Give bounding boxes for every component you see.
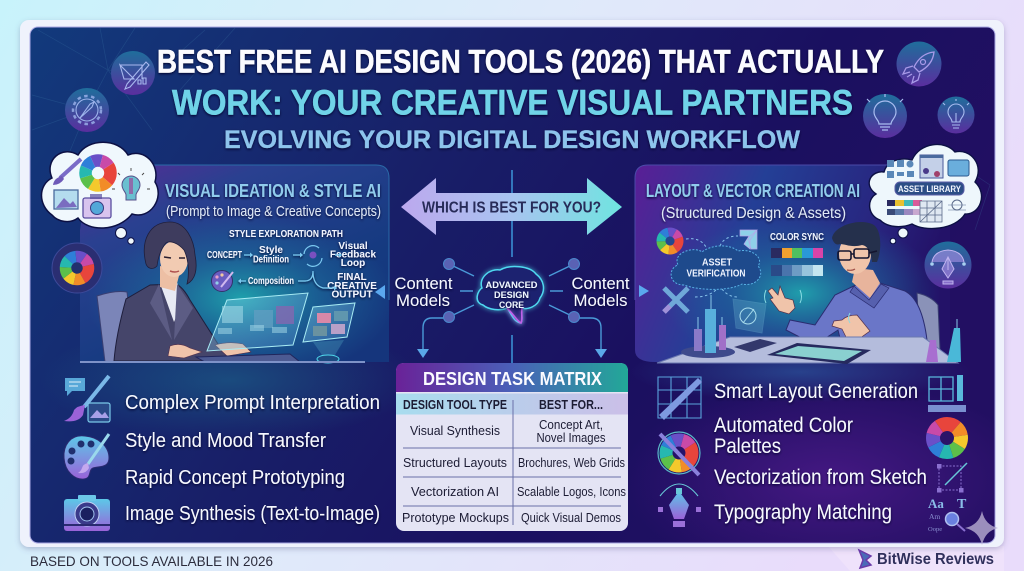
flow: style exploration path: Definition	[253, 254, 289, 266]
central spine	[511, 170, 513, 363]
swatches: color sync	[771, 248, 823, 276]
hub: advanced design core	[477, 267, 543, 323]
decorative icon orbs	[65, 42, 974, 138]
chair	[97, 292, 135, 362]
label: content models left: Content	[394, 274, 453, 293]
icon: vector shape	[740, 230, 757, 249]
illustration: woman	[114, 222, 251, 361]
table: design task matrix: Structured Layouts	[403, 456, 507, 470]
icon: camera	[64, 495, 110, 531]
flow: style exploration path: OUTPUT	[331, 290, 373, 300]
table: design task matrix: Quick Visual Demos	[521, 511, 621, 525]
panel: layout and vector	[635, 165, 961, 364]
model: towers on base	[681, 295, 735, 358]
icon: pen nib with bezier	[658, 484, 701, 527]
cloud: asset verification: ASSET	[702, 256, 732, 268]
list: right features: Vectorization from Sketch	[714, 466, 927, 489]
icon: play marker	[639, 285, 649, 297]
list: left features: Image Synthesis (Text-to-Image)	[125, 503, 380, 525]
flow: style exploration path: Style	[259, 245, 283, 256]
list: left features	[125, 392, 380, 525]
table: design task matrix: Prototype Mockups	[402, 511, 509, 525]
screen: tablet hologram	[303, 303, 355, 342]
icon: rocket orb	[896, 42, 942, 86]
table title: DESIGN TASK MATRIX	[423, 369, 602, 389]
cloud: asset verification	[671, 246, 761, 289]
icon: code folder	[948, 160, 969, 176]
table: design task matrix: Brochures, Web Grids	[518, 456, 625, 470]
icon: magnifier lens	[952, 200, 962, 210]
list: right features: Automated Color	[714, 414, 853, 437]
illustration: man	[764, 222, 927, 358]
footer tab	[828, 546, 1004, 571]
label: content models right	[572, 274, 630, 310]
arrow: which is best for you: WHICH IS BEST FOR YOU?	[422, 200, 601, 216]
hub: advanced design core: ADVANCED	[486, 280, 538, 290]
swatches: palette strip	[887, 200, 922, 215]
panel: visual ideation	[80, 165, 390, 363]
label: content models left: Models	[396, 291, 450, 310]
icon: gear orb	[65, 88, 109, 132]
icon: feedback loop	[304, 246, 322, 266]
thought cloud: asset library	[869, 144, 982, 244]
title line 1: BEST FREE AI DESIGN TOOLS (2026) THAT ACTUALLY	[157, 44, 884, 80]
icon: colour wheel	[86, 160, 110, 186]
desk	[657, 337, 958, 363]
list: right features: Typography Matching	[714, 501, 892, 524]
label: content models right: Models	[574, 291, 628, 310]
icon: crossed tools	[664, 288, 688, 312]
table: design task matrix	[396, 363, 628, 531]
icon: brush and image	[64, 376, 110, 422]
column headers	[396, 394, 628, 414]
icon: vector from sketch	[937, 463, 967, 492]
chair	[917, 293, 940, 350]
list: left features: Style and Mood Transfer	[125, 430, 326, 452]
flow: style exploration path: STYLE EXPLORATION PATH	[229, 229, 343, 240]
icons: small assets	[887, 160, 914, 178]
title line 3: EVOLVING YOUR DIGITAL DESIGN WORKFLOW	[224, 126, 800, 154]
list: right features	[714, 380, 927, 524]
table: design task matrix: Vectorization AI	[411, 485, 499, 499]
dashed connectors	[686, 236, 738, 297]
table: design task matrix: Novel Images	[536, 431, 606, 445]
heading: visual ideation: VISUAL IDEATION & STYLE AI	[165, 181, 381, 201]
icon: type magnifier: Aa	[928, 496, 944, 511]
table: design task matrix: BEST FOR...	[539, 398, 603, 412]
hub: advanced design core: DESIGN	[494, 290, 529, 300]
icon: crossed tools connector	[664, 306, 670, 312]
arrowheads to matrix	[417, 349, 607, 358]
icon: aperture orb	[52, 243, 102, 293]
list: right features: Smart Layout Generation	[714, 380, 918, 403]
footer note: BASED ON TOOLS AVAILABLE IN 2026	[30, 553, 273, 569]
icon: small bulb orb	[938, 96, 974, 134]
icon: type magnifier: Am	[929, 512, 940, 521]
icon: output arrow	[375, 285, 385, 299]
model: pen towers	[926, 319, 961, 362]
icon: brand logo	[859, 550, 871, 568]
icon: bulb orb	[863, 94, 907, 138]
table: design task matrix: Scalable Logos, Icons	[517, 485, 626, 499]
icon: colour dial and tool	[658, 432, 700, 475]
flow: style exploration path: FINAL	[337, 272, 367, 283]
icon: aperture small	[659, 230, 681, 252]
device: laptop	[196, 354, 300, 362]
arrow: which is best for you	[401, 178, 622, 235]
table: design task matrix: DESIGN TOOL TYPE	[403, 398, 507, 412]
heading: layout and vector: LAYOUT & VECTOR CREATION AI	[646, 181, 860, 201]
title	[157, 44, 884, 154]
list: left features: Rapid Concept Prototyping	[125, 467, 345, 489]
subheading: prompt to image: (Prompt to Image & Creative Concepts)	[166, 203, 381, 220]
label: content models right: Content	[572, 274, 630, 293]
cloud: asset verification: VERIFICATION	[686, 268, 746, 280]
thought cloud: left	[42, 142, 158, 244]
icon: magnifier	[948, 205, 966, 210]
icon: palette	[212, 270, 233, 292]
icon: image card	[54, 190, 78, 209]
flow: style exploration path: CREATIVE	[327, 281, 377, 292]
table header	[396, 363, 628, 392]
icon: paint brush	[60, 159, 81, 178]
icon: artboard	[920, 155, 943, 178]
icon: grid	[920, 201, 942, 222]
icon: camera	[83, 194, 111, 218]
icon: palette	[64, 434, 109, 479]
flow: style exploration path: Composition	[248, 276, 294, 287]
desk edge	[80, 361, 365, 363]
grid lines	[403, 400, 621, 525]
flow: style exploration path: Loop	[341, 258, 365, 269]
icon: type magnifier	[928, 496, 967, 533]
device: tablet	[767, 343, 871, 364]
flow: style exploration path: Feedback	[330, 250, 377, 260]
table: design task matrix: Visual Synthesis	[410, 424, 500, 438]
list: right features: Palettes	[714, 435, 781, 458]
title line 2: WORK: YOUR CREATIVE VISUAL PARTNERS	[172, 84, 853, 122]
flow: style exploration path: CONCEPT	[207, 250, 242, 261]
brand: bitwise reviews: BitWise Reviews	[877, 551, 994, 568]
icon: colour wheel	[933, 424, 961, 452]
icon: layout and ruler	[928, 375, 966, 412]
list: left features: Complex Prompt Interpretation	[125, 392, 380, 414]
icon: grid and ruler	[658, 377, 702, 420]
screen: laptop hologram	[207, 293, 308, 351]
subheading: structured design: (Structured Design & Assets)	[661, 205, 846, 222]
icon: sparkle watermark	[965, 511, 998, 545]
heading: color sync: COLOR SYNC	[770, 231, 824, 243]
label: content models left	[394, 274, 453, 310]
icon: pen tool orb	[924, 242, 972, 288]
device: phone	[734, 339, 777, 352]
icon: type magnifier: T	[957, 497, 967, 512]
label: asset library: ASSET LIBRARY	[898, 184, 962, 195]
hub nodes	[444, 258, 580, 322]
icon: type magnifier: Oope	[928, 526, 942, 533]
hologram pedestal	[313, 340, 344, 363]
icon: tools orb	[111, 51, 155, 95]
flow: style exploration path: Visual	[338, 241, 368, 252]
icon: idea bulb	[112, 168, 150, 200]
hub connectors	[423, 264, 601, 350]
hub: advanced design core: CORE	[499, 300, 524, 310]
hologram: vector square	[733, 299, 766, 333]
table: design task matrix: Concept Art,	[539, 418, 603, 432]
flow: style exploration path	[207, 229, 377, 300]
